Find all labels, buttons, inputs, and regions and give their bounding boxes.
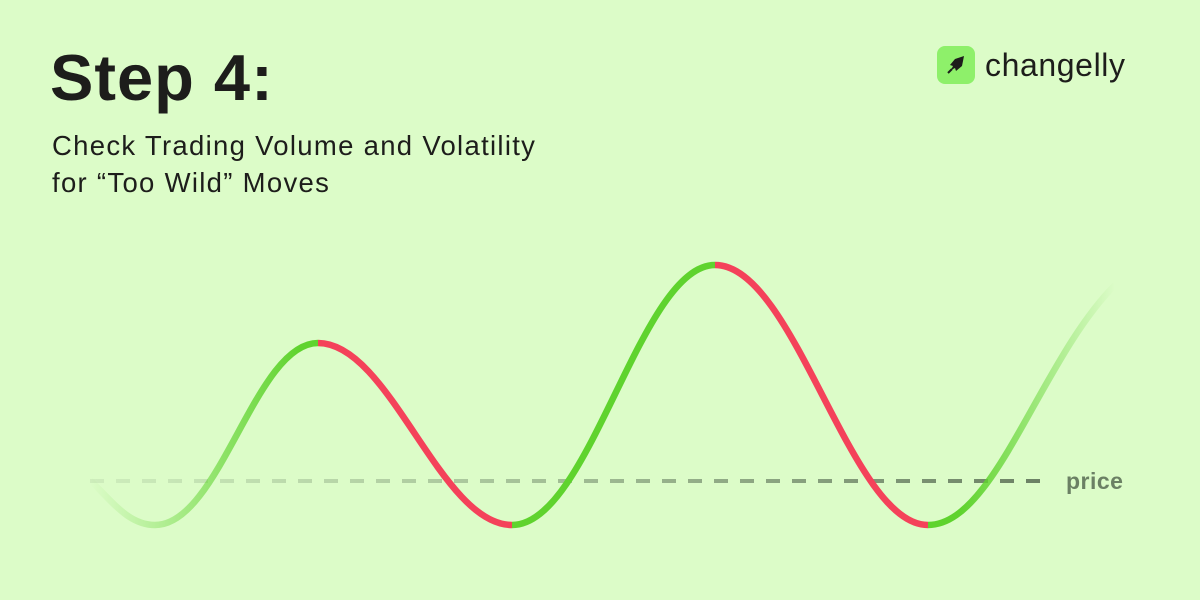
title: Step 4: bbox=[50, 41, 274, 114]
price curve bbox=[90, 265, 1115, 525]
subtitle: for “Too Wild” Moves bbox=[52, 167, 330, 198]
subtitle bbox=[52, 130, 536, 198]
icon: rocket bbox=[937, 46, 975, 84]
brand name: changelly bbox=[985, 47, 1126, 83]
dashed price line bbox=[90, 479, 1045, 483]
logo: changelly bbox=[937, 46, 1126, 84]
label: price: price bbox=[1066, 468, 1123, 494]
subtitle: Check Trading Volume and Volatility bbox=[52, 130, 536, 161]
